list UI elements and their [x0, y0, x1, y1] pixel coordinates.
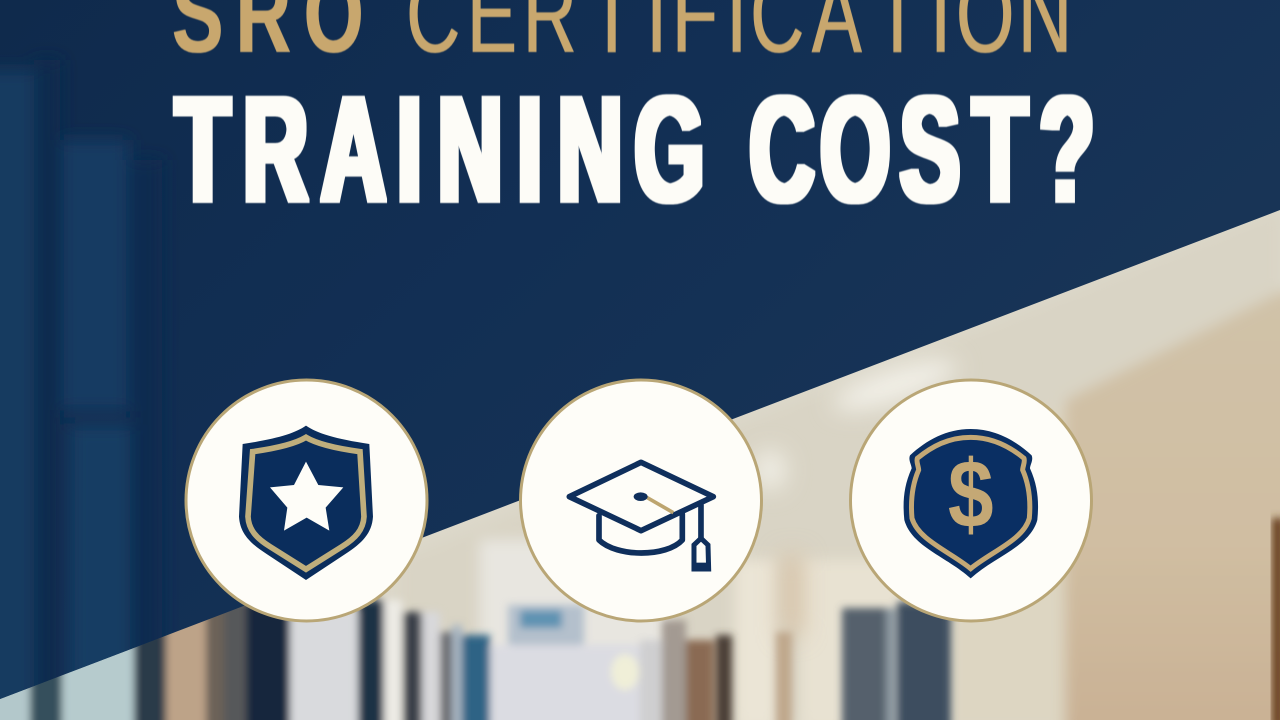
icon: police shield [239, 426, 373, 580]
title [172, 0, 1094, 234]
door edge at right [1272, 518, 1280, 720]
icon badge: shield with dollar sign [850, 380, 1092, 621]
icon: dollar shield [904, 429, 1038, 578]
icon badge: graduation cap [520, 380, 762, 621]
icon badge: shield with dollar sign: $ [948, 441, 994, 549]
icon: mortarboard [569, 462, 713, 553]
icon badge: shield with star [186, 380, 427, 621]
title line 2: TRAINING COST?: TRAINING COST? [175, 66, 1094, 234]
